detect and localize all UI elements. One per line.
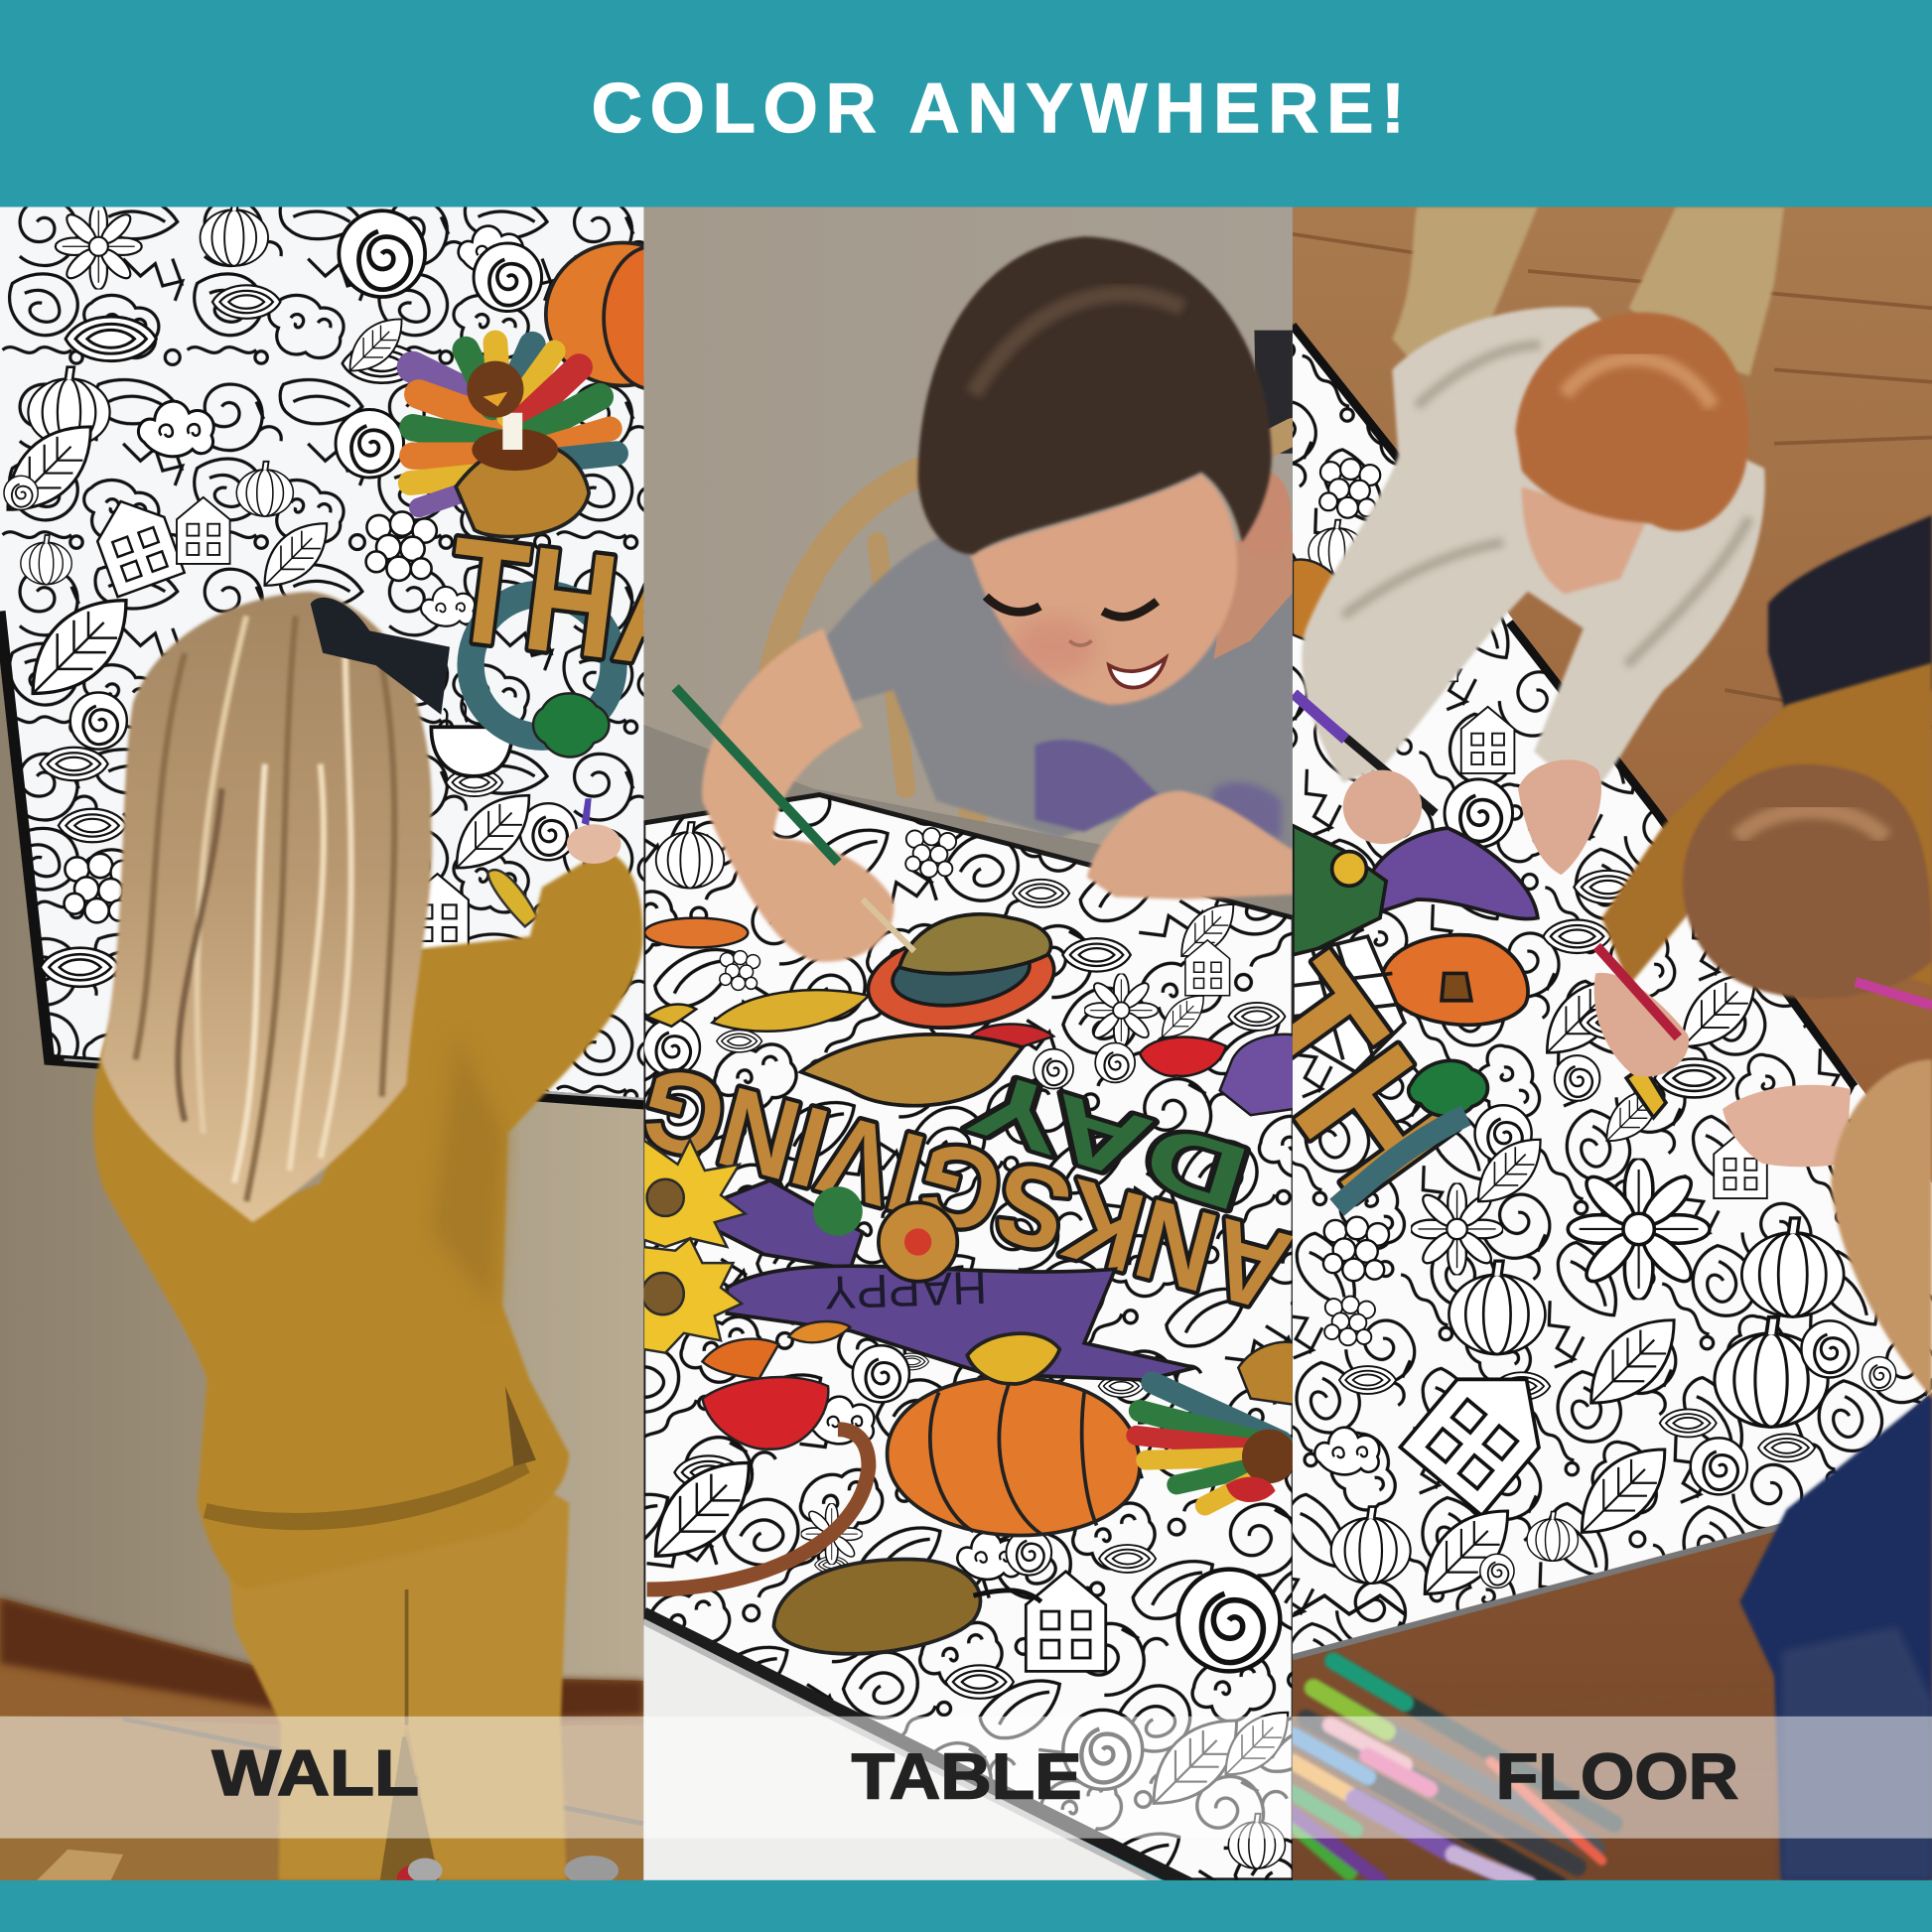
boy in cream sweater	[1294, 207, 1784, 875]
poster on wall	[0, 207, 644, 1106]
poster on table	[643, 794, 1294, 1885]
wooden chair	[770, 431, 1294, 813]
line doodles on table poster	[643, 822, 1288, 1868]
boy at table	[823, 236, 1294, 869]
tan letters: TH	[1193, 924, 1498, 1235]
orange pumpkin	[546, 242, 702, 389]
boy in brown shirt	[1594, 663, 1932, 1076]
panel: wall photo	[0, 207, 717, 1880]
grey t-shirt	[823, 532, 1294, 869]
hair strands	[136, 617, 394, 1201]
purple pilgrim hat	[1368, 828, 1538, 919]
mustard sweater	[93, 850, 643, 1589]
girl seen from behind	[93, 592, 643, 1885]
boy with navy shirt	[1723, 1059, 1932, 1880]
floor poster	[1293, 323, 1932, 1657]
label: table: TABLE	[852, 1740, 1082, 1812]
hair bow	[311, 598, 450, 715]
panel: floor photo	[1193, 207, 1932, 1880]
coloring markers	[1293, 1661, 1614, 1885]
label: wall: WALL	[211, 1737, 419, 1809]
orange pumpkin flower	[1382, 935, 1528, 1025]
line doodles on floor poster	[1294, 459, 1896, 1614]
title: COLOR ANYWHERE!	[592, 69, 1405, 147]
colored turkey on table	[1136, 1342, 1297, 1506]
green lettering	[1293, 826, 1386, 961]
orange poster corner	[1293, 559, 1346, 647]
hand and pen	[567, 824, 621, 864]
colored mushroom and apple	[967, 1024, 1294, 1115]
sunflowers	[642, 1140, 746, 1353]
translucent label band	[0, 1717, 1932, 1839]
purple banner HAPPY	[684, 1180, 1195, 1380]
poster lettering upside down: DAY	[959, 1049, 1259, 1229]
roast potato	[773, 1560, 1041, 1654]
wall background	[643, 207, 1294, 897]
khaki legs	[1392, 207, 1784, 382]
baseboard and wood floor	[0, 1598, 643, 1880]
colored hat	[862, 914, 1060, 1038]
neck	[1213, 530, 1294, 659]
colored turkey	[410, 343, 617, 537]
purple banner HAPPY: HAPPY	[823, 1261, 988, 1319]
cream sweater	[1302, 307, 1765, 794]
face	[1522, 486, 1645, 594]
blonde hair	[101, 592, 432, 1222]
wood floor	[1293, 207, 1932, 1880]
colored poster art	[1193, 826, 1666, 1235]
teal swirl	[1337, 1115, 1466, 1207]
yellow corn	[1626, 1066, 1666, 1118]
dark trouser leg	[1768, 515, 1932, 715]
hands and marker	[1294, 694, 1436, 813]
label: floor: FLOOR	[1496, 1740, 1738, 1812]
mustard pants	[228, 1478, 569, 1880]
boy's drawing arm and pencil	[675, 628, 914, 962]
panel: table photo	[627, 207, 1303, 1880]
cornucopia	[801, 1035, 1023, 1106]
colored carrot and wheat	[644, 918, 869, 1032]
shoes	[397, 1856, 619, 1885]
top teal banner	[0, 0, 1932, 207]
ear	[1237, 471, 1292, 559]
bottom teal band	[0, 1880, 1932, 1932]
boy's right hand	[1087, 791, 1294, 899]
eyes and smile	[986, 597, 1166, 688]
big orange pumpkin	[888, 1333, 1140, 1536]
red-brown hair	[1516, 313, 1749, 531]
line doodles on wall poster	[4, 201, 614, 994]
hair	[918, 236, 1272, 554]
grid pattern cell	[1293, 936, 1405, 1072]
colored apple and leaves	[702, 1321, 850, 1449]
hand and red marker	[1594, 973, 1689, 1076]
wall background	[0, 207, 644, 1880]
face	[971, 475, 1237, 705]
clover	[1409, 1060, 1487, 1116]
table edge	[643, 725, 1294, 926]
